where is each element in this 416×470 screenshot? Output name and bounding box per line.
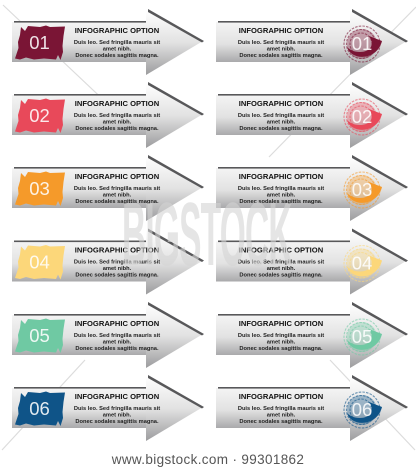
text 02 left xyxy=(74,99,160,132)
text 01 left: amet nibh. xyxy=(103,46,132,52)
badge 01 right xyxy=(344,26,382,62)
text 04 left: Duis leo. Sed fringilla mauris sit xyxy=(74,260,160,266)
arrow 02 left xyxy=(12,82,204,148)
arrow 06 right xyxy=(216,375,408,441)
text 04 left: Donec sodales sagittis magna. xyxy=(75,272,159,278)
text 04 right: amet nibh. xyxy=(267,266,296,272)
badge 04 right xyxy=(344,246,382,282)
text 01 left: Donec sodales sagittis magna. xyxy=(75,53,159,59)
arrow 05 right xyxy=(216,302,408,368)
text 01 right xyxy=(238,26,324,59)
text 02 right: Donec sodales sagittis magna. xyxy=(239,126,323,132)
badge 02 right xyxy=(344,99,382,135)
text 05 left: INFOGRAPHIC OPTION xyxy=(75,319,159,328)
badge 06 xyxy=(15,392,65,426)
text 06 right: Duis leo. Sed fringilla mauris sit xyxy=(238,406,324,412)
badge 06 right xyxy=(344,392,382,428)
text 05 right: INFOGRAPHIC OPTION xyxy=(239,319,323,328)
text 05 right: Donec sodales sagittis magna. xyxy=(239,346,323,352)
badge 02: 02 xyxy=(29,105,50,126)
badge 03 xyxy=(15,172,65,206)
text 05 left: amet nibh. xyxy=(103,339,132,345)
text 04 left xyxy=(74,246,160,278)
text 06 left: INFOGRAPHIC OPTION xyxy=(75,392,159,401)
text 03 right: Duis leo. Sed fringilla mauris sit xyxy=(238,186,324,192)
text 01 left: INFOGRAPHIC OPTION xyxy=(75,26,159,35)
text 02 right: amet nibh. xyxy=(267,119,296,125)
badge 02 right: 02 xyxy=(352,106,372,127)
text 03 right: Donec sodales sagittis magna. xyxy=(239,199,323,205)
badge 05 xyxy=(15,318,65,353)
text 04 right: INFOGRAPHIC OPTION xyxy=(239,246,323,254)
badge 05: 05 xyxy=(29,325,50,346)
text 01 right: Duis leo. Sed fringilla mauris sit xyxy=(238,40,324,46)
arrow 01 left xyxy=(12,9,204,75)
text 05 left: Duis leo. Sed fringilla mauris sit xyxy=(74,333,160,339)
text 05 right: amet nibh. xyxy=(267,339,296,345)
text 03 left: INFOGRAPHIC OPTION xyxy=(75,172,159,181)
text 03 right: INFOGRAPHIC OPTION xyxy=(239,172,323,181)
text 05 left xyxy=(74,319,160,352)
text 01 left xyxy=(74,26,160,59)
badge 03 right xyxy=(344,172,382,208)
text 06 right: amet nibh. xyxy=(267,412,296,418)
text 03 left xyxy=(74,172,160,205)
text 01 right: INFOGRAPHIC OPTION xyxy=(239,26,323,35)
text 04 right: Donec sodales sagittis magna. xyxy=(239,272,323,278)
arrow 03 left xyxy=(12,155,204,221)
badge 04 right: 04 xyxy=(352,252,372,274)
text 06 left xyxy=(74,392,160,425)
text 02 left: Duis leo. Sed fringilla mauris sit xyxy=(74,113,160,119)
arrow 04 right xyxy=(216,228,408,294)
text 03 left: Donec sodales sagittis magna. xyxy=(75,199,159,205)
badge 05 right: 05 xyxy=(352,326,372,347)
text 06 right: INFOGRAPHIC OPTION xyxy=(239,392,323,401)
text 02 right: Duis leo. Sed fringilla mauris sit xyxy=(238,113,324,119)
arrow 01 right xyxy=(216,9,408,75)
badge 06: 06 xyxy=(29,398,50,419)
text 03 right: amet nibh. xyxy=(267,192,296,198)
footer: image id: www.bigstock.com · 99301862 xyxy=(111,452,304,467)
text 01 left: Duis leo. Sed fringilla mauris sit xyxy=(74,40,160,46)
badge 03: 03 xyxy=(29,178,50,199)
text 02 right xyxy=(238,99,324,132)
text 03 right xyxy=(238,172,324,205)
text 04 left: amet nibh. xyxy=(103,266,132,272)
text 02 left: INFOGRAPHIC OPTION xyxy=(75,99,159,108)
badge 01 xyxy=(15,26,65,60)
text 02 right: INFOGRAPHIC OPTION xyxy=(239,99,323,108)
arrow 03 right xyxy=(216,155,408,221)
text 05 left: Donec sodales sagittis magna. xyxy=(75,346,159,352)
arrow 02 right xyxy=(216,82,408,148)
text 06 left: amet nibh. xyxy=(103,412,132,418)
arrow 05 left xyxy=(12,302,204,368)
badge 01 right: 01 xyxy=(352,33,372,54)
badge 03 right: 03 xyxy=(352,179,372,200)
text 05 right: Duis leo. Sed fringilla mauris sit xyxy=(238,333,324,339)
arrow 04 left xyxy=(12,228,204,294)
badge 06 right: 06 xyxy=(352,399,372,420)
text 03 left: amet nibh. xyxy=(103,192,132,198)
text 02 left: amet nibh. xyxy=(103,119,132,125)
text 01 right: Donec sodales sagittis magna. xyxy=(239,53,323,59)
text 06 right xyxy=(238,392,324,425)
text 01 right: amet nibh. xyxy=(267,46,296,52)
text 02 left: Donec sodales sagittis magna. xyxy=(75,126,159,132)
badge 02 xyxy=(15,98,65,133)
text 04 left: INFOGRAPHIC OPTION xyxy=(75,246,159,254)
text 06 left: Duis leo. Sed fringilla mauris sit xyxy=(74,406,160,412)
text 06 right: Donec sodales sagittis magna. xyxy=(239,419,323,425)
badge 04: 04 xyxy=(29,251,50,272)
text 04 right xyxy=(238,246,324,278)
badge 01: 01 xyxy=(29,32,50,53)
badge 05 right xyxy=(344,319,382,355)
arrow 06 left xyxy=(12,375,204,441)
text 05 right xyxy=(238,319,324,352)
text 04 right: Duis leo. Sed fringilla mauris sit xyxy=(238,260,324,266)
badge 04 xyxy=(15,245,65,280)
watermark: BIGSTOCK: BIGSTOCK xyxy=(122,184,293,285)
text 03 left: Duis leo. Sed fringilla mauris sit xyxy=(74,186,160,192)
text 06 left: Donec sodales sagittis magna. xyxy=(75,419,159,425)
